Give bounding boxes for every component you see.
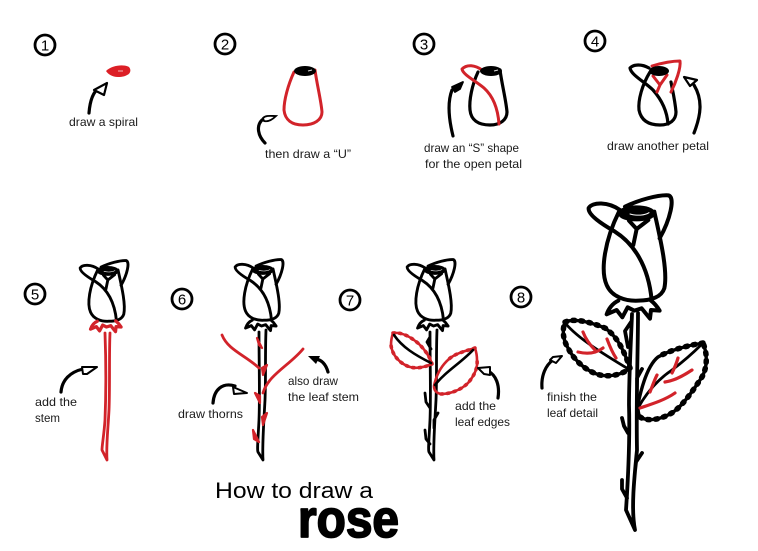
title — [215, 478, 399, 549]
icon: red thorns — [253, 338, 267, 442]
step number 6 — [172, 289, 192, 309]
panel: step 4 another petal — [585, 31, 709, 153]
label: add the leaf edges: add the — [455, 399, 496, 413]
arrow to leaf stem — [308, 356, 328, 372]
icon: right leaf red veins — [640, 358, 692, 408]
label: also draw the leaf stem: the leaf stem — [288, 390, 359, 404]
arrow to stem — [61, 367, 97, 392]
label: then draw a U: then draw a “U” — [265, 147, 351, 161]
label: add the stem: add the — [35, 395, 77, 409]
icon: left leaf with midrib — [563, 320, 630, 376]
icon: U shape with spiral — [284, 66, 322, 125]
title: rose — [298, 490, 399, 549]
icon: red leaf edges — [391, 333, 477, 394]
step number 7: 7 — [346, 292, 354, 310]
icon: red spiral — [106, 65, 130, 77]
step number 3: 3 — [420, 36, 428, 54]
arrow to thorns — [213, 385, 247, 403]
step number 2: 2 — [221, 36, 229, 54]
arrow to leaf detail — [542, 356, 562, 388]
label: draw an S shape for the open petal: for the open petal — [425, 157, 522, 171]
icon: rose bud — [80, 261, 128, 321]
panel: step 6 thorns and leaf stem — [172, 260, 359, 460]
arrow to spiral — [89, 83, 107, 113]
step number 5: 5 — [31, 286, 39, 304]
step number 1: 1 — [41, 38, 49, 54]
label: draw thorns: draw thorns — [178, 407, 243, 421]
label: also draw the leaf stem — [288, 374, 359, 404]
label: finish the leaf detail: leaf detail — [547, 406, 598, 420]
icon: bud with S petal — [462, 66, 507, 125]
panel: step 5 stem — [25, 261, 128, 460]
icon: rose bud with sepals — [407, 260, 455, 331]
label: also draw the leaf stem: also draw — [288, 374, 338, 388]
label: add the leaf edges: leaf edges — [455, 415, 510, 429]
icon: red leaf stems — [222, 335, 303, 393]
icon: large rose bud with sepals — [589, 195, 672, 319]
label: draw an S shape for the open petal: draw an “S” shape — [424, 141, 519, 155]
label: finish the leaf detail — [547, 390, 598, 420]
step number 8 — [511, 287, 531, 307]
arrow to leaf edge — [478, 367, 499, 398]
panel: step 8 finished rose — [511, 195, 706, 530]
icon: large stem with thorns — [622, 313, 642, 530]
icon: left leaf red veins — [578, 332, 616, 358]
panel: step 7 leaf edges — [340, 260, 510, 460]
step number 4: 4 — [591, 34, 599, 50]
step number 7 — [340, 290, 360, 310]
label: draw another petal: draw another petal — [607, 139, 709, 153]
icon: right leaf with midrib — [638, 343, 706, 420]
icon: black leaf midribs — [394, 335, 473, 385]
label: finish the leaf detail: finish the — [547, 390, 597, 404]
icon: stem with thorns — [425, 330, 438, 460]
label: draw an S shape for the open petal — [424, 141, 522, 171]
title: How to draw a — [215, 478, 374, 503]
icon: bud with second petal — [630, 61, 680, 125]
label: add the stem: stem — [35, 411, 60, 425]
panel: step 1 spiral — [35, 35, 138, 129]
icon: red sepals and stem — [91, 321, 121, 460]
label: add the stem — [35, 395, 77, 425]
icon: stem — [258, 330, 266, 460]
step number 6: 6 — [178, 292, 186, 308]
arrow to second petal — [684, 77, 700, 133]
icon: rose bud with sepals — [235, 260, 283, 331]
panel: step 3 open petal — [414, 34, 522, 171]
arrow to petal — [449, 82, 463, 136]
step number 5 — [25, 284, 45, 304]
label: draw a spiral: draw a spiral — [69, 115, 138, 129]
panel: step 2 U shape — [215, 34, 351, 161]
step number 8: 8 — [517, 290, 525, 306]
arrow to U — [258, 116, 276, 143]
label: add the leaf edges — [455, 399, 510, 429]
